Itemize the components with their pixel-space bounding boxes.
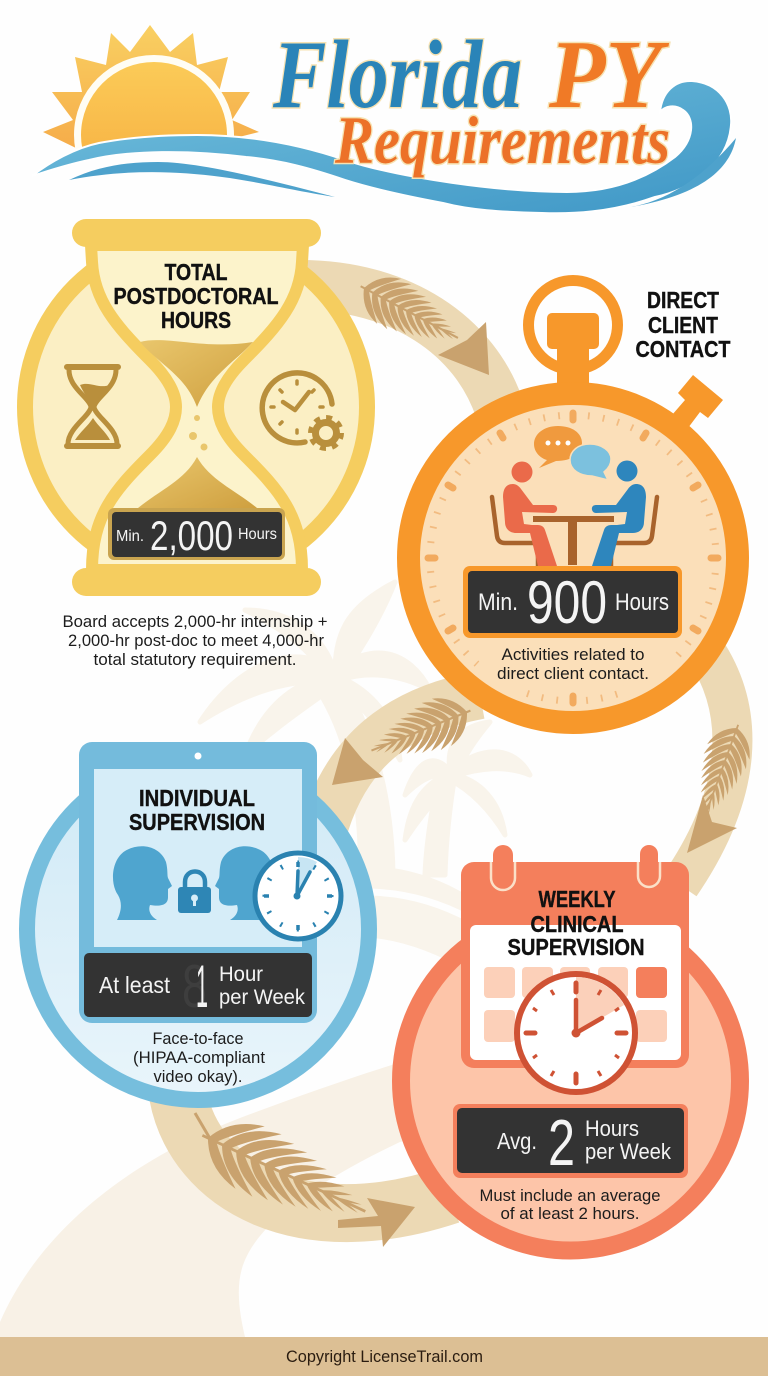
icon: two heads [113,846,274,920]
LCD readout: 1 hour per week [84,953,312,1020]
LCD readout: 2 hours per week: Avg. [497,1128,537,1154]
icon: speech bubbles [534,426,611,480]
stopwatch crown [528,280,723,428]
frond arrow: stopwatch to tablet [332,687,480,785]
caption [480,1186,660,1223]
caption: 2,000-hr post-doc to meet 4,000-hr [68,631,324,650]
caption: direct client contact. [497,664,649,683]
icon: lower wave [69,162,335,197]
LCD readout: 2 hours per week [453,1104,688,1179]
heading: CLINICAL [530,911,624,937]
heading: HOURS [161,307,231,333]
LCD readout: 2,000 hours: Min. [116,528,144,545]
icon: small hourglass [67,367,118,446]
title [272,21,670,178]
stopwatch body [408,394,738,722]
hourglass backdrop circle [25,236,367,578]
LCD readout: 2,000 hours: Hours [238,526,277,543]
heading: DIRECT [647,287,719,313]
footer [0,1337,768,1376]
icon: two people at table [492,460,657,566]
LCD readout: 2 hours per week: per Week [585,1139,672,1164]
icon: clock at one o'clock [255,853,341,939]
title: Requirements [334,102,670,178]
heading: SUPERVISION [129,809,265,835]
LCD readout: 900 hours: Hours [615,589,669,616]
LCD readout: 1 hour per week: Hour [219,963,263,986]
background palm trees [200,582,530,970]
ring arrow band: stopwatch to tablet [322,695,480,835]
heading: CLIENT [648,312,718,338]
heading [129,785,265,835]
LCD readout: 2,000 hours: 2,000 [150,512,233,559]
caption: Face-to-face [152,1029,244,1048]
LCD readout: 900 hours: Min. [478,589,518,616]
icon: sun [43,25,259,149]
LCD readout: 1 hour per week: 1 [196,953,208,1020]
panel: total postdoctoral hours [25,219,367,669]
panel: individual supervision [27,742,369,1100]
tablet frame [79,742,317,1023]
frond arrow: tablet to calendar [188,1104,415,1247]
LCD readout: 2 hours per week: Hours [585,1116,639,1141]
LCD readout: 900 hours: 900 [527,569,607,636]
heading: SUPERVISION [508,934,644,960]
LCD readout: 1 hour per week: per Week [219,986,305,1009]
heading: WEEKLY [538,886,616,912]
icon: main wave [32,81,731,213]
heading: POSTDOCTORAL [114,283,278,309]
heading [114,259,278,333]
ring arrow band: tablet to calendar [178,1095,450,1213]
stopwatch minute ticks [428,413,718,703]
panel: weekly clinical supervision [401,845,740,1250]
LCD readout: 1 hour per week: At least [99,972,171,998]
icon: padlock [178,872,211,913]
footer: Copyright LicenseTrail.com [286,1348,483,1366]
caption: Activities related to [502,645,644,664]
title: Florida [272,21,522,129]
caption: (HIPAA-compliant [133,1048,265,1067]
caption: video okay). [154,1067,242,1086]
caption: Must include an average [480,1186,660,1205]
heading [636,287,730,362]
LCD readout: 2 hours per week: 2 [548,1106,575,1179]
backdrop circle [27,758,369,1100]
LCD readout: 900 hours [463,566,682,638]
icon: right wave [631,138,736,207]
caption: of at least 2 hours. [500,1204,640,1223]
title: PY [548,21,670,129]
icon: clock at two o'clock [517,974,635,1092]
backdrop circle [401,912,740,1250]
LCD readout: 1 hour per week: 8 [182,953,207,1020]
background sand dune [0,1040,560,1337]
calendar [461,845,689,1068]
panel: direct client contact [408,280,738,722]
ring arrow band: stopwatch to calendar [680,650,732,885]
heading: INDIVIDUAL [139,785,255,811]
heading: CONTACT [636,336,730,362]
header: sun and waves [32,25,736,215]
heading: TOTAL [164,259,228,285]
caption: Board accepts 2,000-hr internship + [62,612,328,631]
LCD readout: 2,000 hours [108,508,285,560]
frond arrow: hourglass to stopwatch [349,264,489,375]
ring arrow band: hourglass to stopwatch [300,285,500,410]
caption [133,1029,265,1086]
frond arrow: stopwatch to calendar [683,717,759,853]
heading [508,886,644,960]
sand mound highlight stripe [365,892,470,919]
sand: upper bulb [140,340,253,407]
sand: lower bulb [138,457,257,508]
icon: clock and gear [262,373,342,448]
sand: falling grains [189,415,208,450]
hourglass frame [72,219,321,596]
caption [497,645,649,683]
caption: total statutory requirement. [94,650,296,669]
caption [62,612,328,669]
